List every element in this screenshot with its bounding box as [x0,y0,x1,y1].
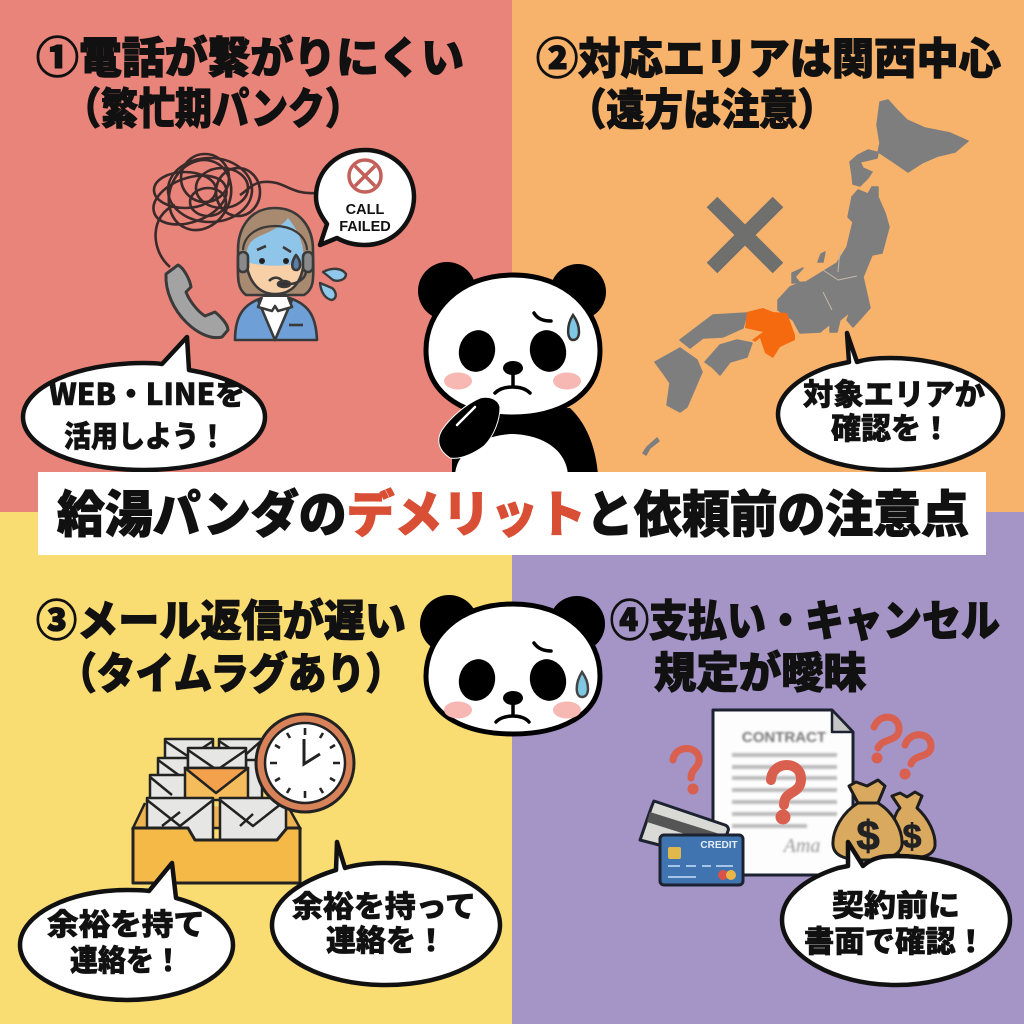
map of Japan [643,100,968,455]
callout: contact with time to spare, left: 連絡を！ [70,936,182,980]
panel background purple [512,512,1024,1024]
icon: call failed speech bubble: FAILED [339,219,391,235]
callout: check service area: 対象エリアか [803,370,985,414]
panel background red [0,0,512,512]
heading 1 [36,24,464,137]
callout: use WEB and LINE: WEB・LINEを [49,370,245,414]
icon: tangled phone cord [147,150,316,267]
title banner: 給湯パンダのデメリットと依頼前の注意点 [57,475,969,547]
icon: contract document: CONTRACT [742,729,826,746]
icon: call failed speech bubble [316,150,414,245]
panel: slow mail reply [0,512,512,1024]
callout: contact with time to spare, right [272,842,500,985]
heading 2: （遠方は注意） [568,76,836,138]
callout: confirm in writing: 書面で確認！ [804,917,986,961]
icon: contract document: Ama [782,835,820,857]
panel: phone hard to reach [0,0,512,512]
icon: large X mark [712,202,778,268]
callout: check service area [778,333,1003,470]
heading 2: ②対応エリアは関西中心 [536,25,1001,87]
panel: service area Kansai [512,0,1024,512]
callout: contact with time to spare, right: 連絡を！ [326,916,446,960]
callout: confirm in writing: 契約前に [832,881,960,925]
heading 3: （タイムラグあり） [58,640,404,702]
icon: mail tray [133,739,300,883]
icon: money bags: $ [903,818,922,856]
icon: contract document [713,710,853,875]
callout: contact with time to spare, right: 余裕を持って [292,882,476,926]
icon: credit cards [640,801,743,885]
icon: money bags [833,780,935,860]
icon: telephone handset [166,265,228,338]
heading 3: ③メール返信が遅い [36,587,406,649]
callout: check service area: 確認を！ [831,404,951,448]
heading 1: （繁忙期パンク） [64,75,362,137]
map highlight: Kansai [745,308,795,358]
panel background yellow [0,512,512,1024]
callout: use WEB and LINE: 活用しよう！ [64,412,226,456]
icon: sweat drops [320,269,346,300]
icon: call failed speech bubble: CALL [346,202,384,218]
callout: contact with time to spare, left [20,863,233,1000]
callout: contact with time to spare, left: 余裕を持て [47,900,205,944]
callout: use WEB and LINE [23,337,265,470]
panel background orange [512,0,1024,512]
heading 2 [536,25,1001,138]
panda: thinking with hand on chin [418,262,606,475]
heading 4 [610,587,1000,701]
heading 3 [36,587,406,702]
icon: credit cards: CREDIT [700,840,738,851]
icon: money bags: $ [856,812,880,859]
icon: wall clock [256,714,354,812]
callout: confirm in writing [782,842,1010,985]
icon: worried operator [235,208,317,340]
heading 4: 規定が曖昧 [654,639,866,701]
panda: worried face [420,595,605,734]
icon: question marks [673,717,931,794]
panel: payment and cancellation [512,512,1024,1024]
heading 1: ①電話が繋がりにくい [36,24,464,86]
